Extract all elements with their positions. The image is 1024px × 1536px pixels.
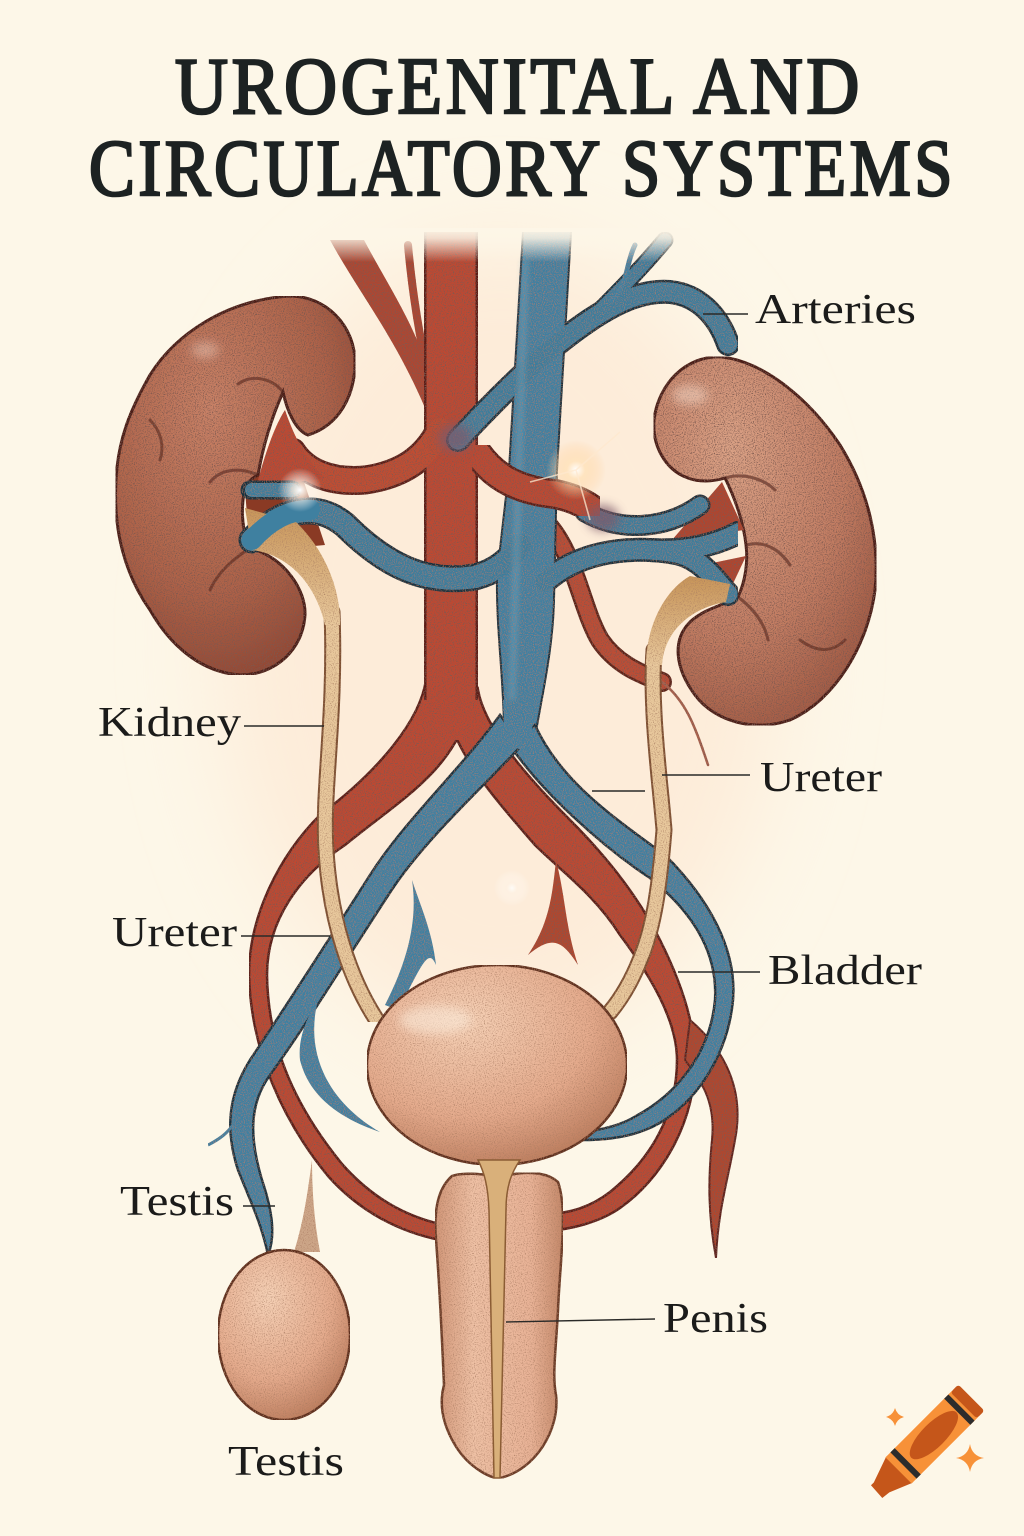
red arteries (249, 232, 746, 1258)
ureter funnels (245, 508, 340, 625)
renal pelvis red (256, 410, 325, 488)
testis (218, 1160, 350, 1420)
labels: Penis (663, 1296, 768, 1342)
left iliac vein (230, 715, 522, 1255)
left vein over funnel (252, 510, 310, 540)
bladder (367, 965, 627, 1165)
right outer branch (685, 1020, 738, 1258)
labels: Arteries (755, 287, 916, 333)
small vein branches (385, 880, 436, 1010)
aorta and left renal artery (292, 232, 451, 740)
right iliac artery (455, 690, 695, 1231)
urethra (478, 1160, 520, 1478)
labels: Testis (120, 1179, 234, 1225)
label lines (241, 314, 760, 1322)
hilum backing left (244, 470, 325, 552)
blue smudges where veins meet arteries (438, 424, 619, 531)
left iliac artery (249, 680, 470, 1240)
kidney right (654, 357, 876, 725)
icon: crayon logo (864, 1385, 984, 1505)
upper left artery branches (330, 240, 430, 420)
labels: Bladder (768, 948, 922, 994)
blue veins (208, 232, 738, 1255)
highlights (191, 342, 708, 1034)
top fade of vessels (320, 228, 690, 262)
labels: Kidney (98, 700, 241, 746)
labels: Ureter (760, 755, 882, 801)
title (89, 43, 956, 213)
title: UROGENITAL AND (175, 43, 863, 131)
labels: Ureter (112, 910, 237, 956)
right iliac vein (510, 725, 733, 1140)
right renal artery crossing over vena cava (472, 445, 600, 516)
penis (435, 1173, 563, 1478)
labels: Testis (228, 1439, 344, 1485)
labels (98, 287, 922, 1485)
vein tree outline (250, 232, 738, 732)
ureters (245, 508, 730, 1022)
kidney left (116, 296, 355, 675)
right lower renal artery (548, 525, 662, 682)
